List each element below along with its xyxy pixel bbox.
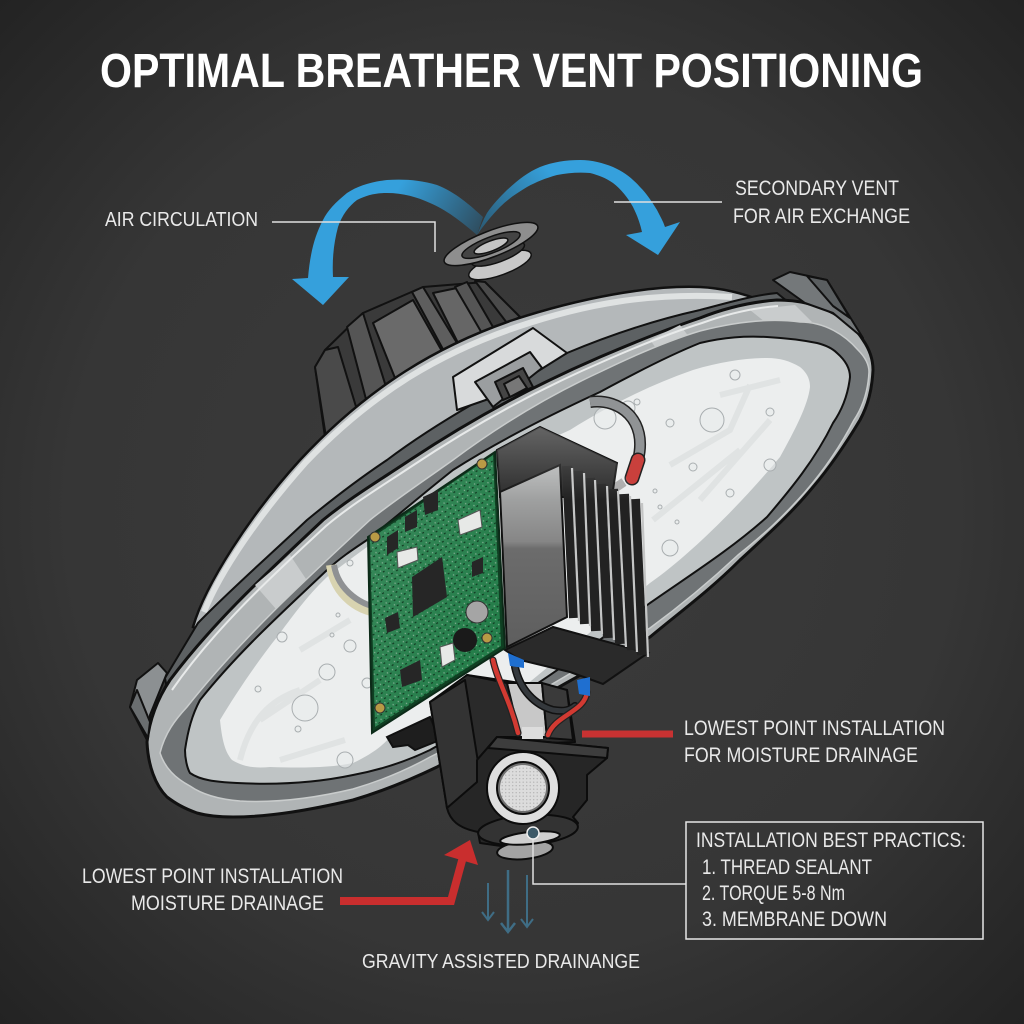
- label: secondary vent: FOR AIR EXCHANGE: [733, 205, 910, 228]
- callout: installation best practices: 2. TORQUE 5-8 Nm: [702, 882, 845, 905]
- ring clip: [453, 328, 567, 410]
- dome highlight: [204, 296, 732, 612]
- pcb white capacitors: [397, 510, 482, 667]
- label: secondary vent: [614, 177, 910, 228]
- pcb round capacitor: [466, 601, 488, 623]
- outer ring: [147, 300, 873, 817]
- pcb mounting holes: [370, 459, 492, 713]
- label: lowest point right: FOR MOISTURE DRAINAGE: [684, 744, 918, 767]
- callout leader: [527, 827, 686, 884]
- heatsink fins: [567, 466, 648, 657]
- heatsink back plate: [497, 427, 617, 497]
- callout: installation best practices: 3. MEMBRANE DOWN: [702, 908, 887, 931]
- breather vent cap: [440, 214, 542, 286]
- label: lowest point left with arrow: LOWEST POINT INSTALLATION: [82, 865, 343, 888]
- ring tab right: [773, 272, 863, 338]
- rear housing with ribs: [315, 281, 520, 437]
- wires red and black: [493, 653, 590, 739]
- label: secondary vent: SECONDARY VENT: [735, 177, 899, 200]
- blue arrow left: [292, 180, 483, 305]
- callout: installation best practices: 1. THREAD SEALANT: [702, 856, 872, 879]
- label: air circulation: [105, 209, 435, 252]
- wire: tan cable left: [331, 565, 386, 613]
- module back interior: [467, 675, 575, 745]
- callout: installation best practices: [686, 822, 983, 939]
- glass edge: [185, 337, 850, 784]
- circuit board: [368, 452, 505, 733]
- drain body: [447, 737, 608, 850]
- gravity drainage arrows: [482, 870, 533, 932]
- wire: grey cable to connector: [590, 402, 640, 490]
- heatsink base: [505, 627, 648, 684]
- pcb chips: [385, 490, 483, 687]
- lens dome: [193, 287, 762, 650]
- vent module: [430, 675, 608, 862]
- label: lowest point right: LOWEST POINT INSTALLATION: [684, 717, 945, 740]
- ring dark band: [160, 320, 869, 801]
- label: lowest point right: [582, 717, 945, 767]
- label: air circulation: AIR CIRCULATION: [105, 209, 258, 231]
- label: lowest point left with arrow: [82, 840, 478, 915]
- dark band between dome and ring: [165, 293, 810, 705]
- label: gravity drainage: GRAVITY ASSISTED DRAINANGE: [362, 951, 640, 973]
- ring facets: [255, 305, 812, 625]
- ring upper white line: [172, 306, 778, 690]
- ring tab left: [130, 663, 167, 740]
- water droplets: [255, 370, 776, 768]
- glass frosted centre: [220, 358, 810, 768]
- glass inner pattern: [240, 380, 780, 760]
- lower nut: [477, 812, 579, 848]
- blue arrow right: [477, 160, 680, 255]
- pcb large inductor: [453, 628, 477, 652]
- membrane ring: [487, 752, 559, 824]
- heatsink: [497, 427, 648, 684]
- glass haze over heatsink: [497, 427, 640, 500]
- heatsink face: [500, 465, 567, 647]
- glass interior: [185, 337, 850, 784]
- callout: installation best practices: INSTALLATION BEST PRACTICS:: [696, 829, 966, 852]
- module side panels: [430, 675, 520, 808]
- connector pins under board: [387, 717, 440, 750]
- label: lowest point left with arrow: MOISTURE DRAINAGE: [131, 892, 324, 915]
